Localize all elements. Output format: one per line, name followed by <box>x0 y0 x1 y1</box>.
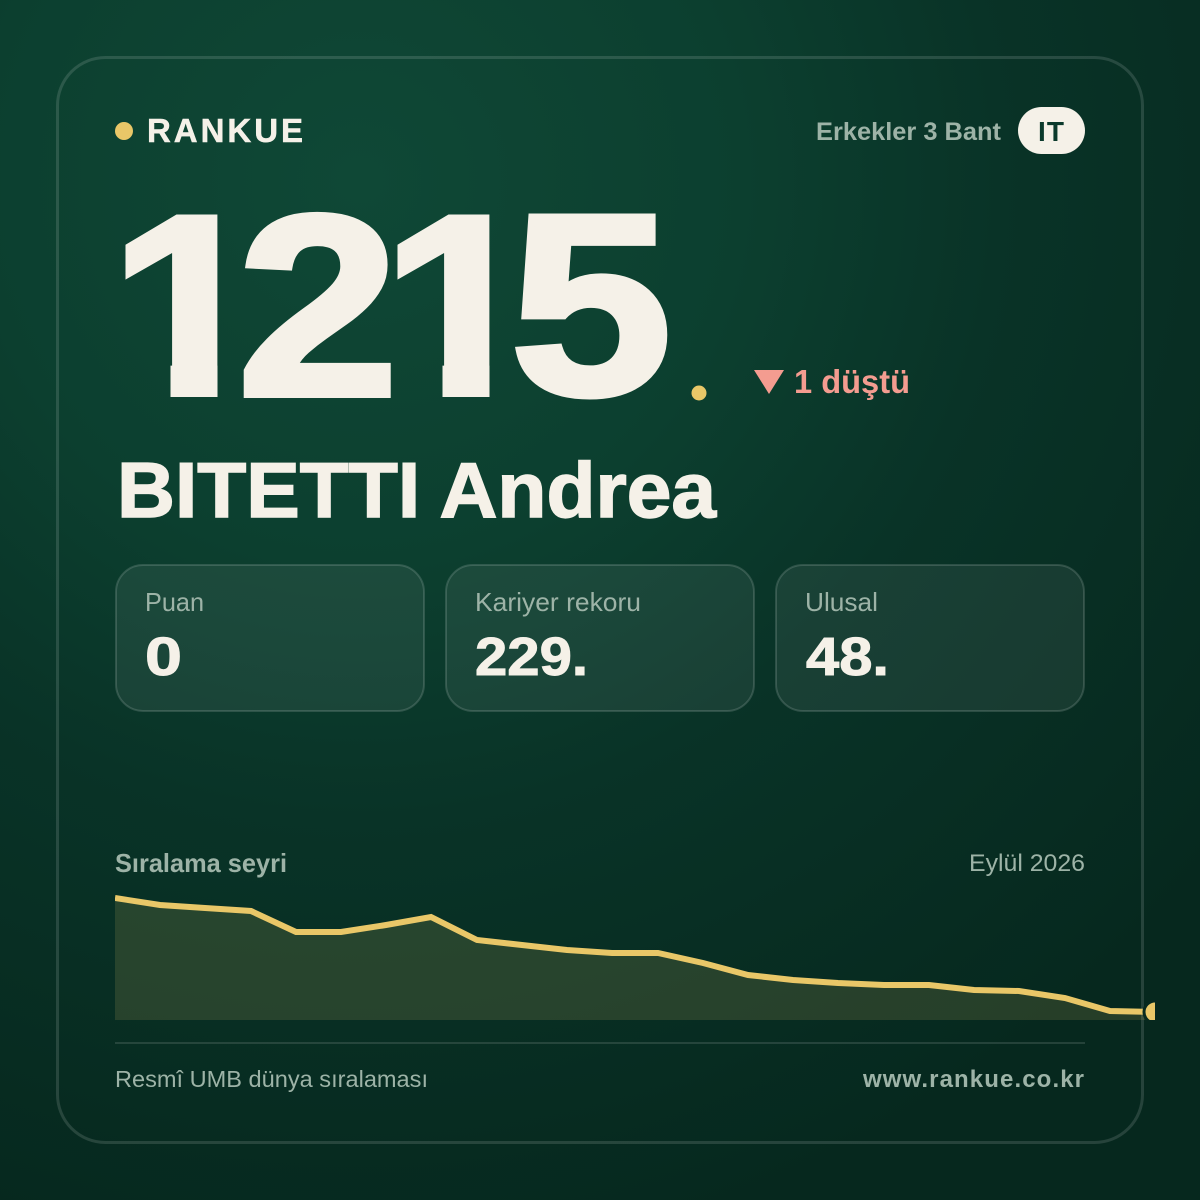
rank change: 1 düştü <box>794 363 910 400</box>
rank dot <box>692 386 706 400</box>
chart date: Eylül 2026 <box>969 850 1085 877</box>
rank number: 2 <box>237 161 399 450</box>
rank number: 5 <box>510 160 672 449</box>
panel: national: 48. <box>806 627 889 687</box>
chart heading: Sıralama seyri <box>115 848 287 878</box>
panel: career high <box>446 565 754 711</box>
footer website: www.rankue.co.kr <box>862 1066 1084 1093</box>
panel: points <box>116 565 424 711</box>
brand logo: RANKUE <box>147 112 303 149</box>
footer source: Resmî UMB dünya sıralaması <box>115 1066 428 1092</box>
panel: career high: Kariyer rekoru <box>475 587 641 617</box>
country badge <box>1018 107 1085 154</box>
category label: Erkekler 3 Bant <box>816 118 1002 146</box>
rank number: 1 <box>382 161 538 450</box>
player name: BITETTI Andrea <box>117 446 717 534</box>
panel: points: 0 <box>145 627 182 687</box>
panel: career high: 229. <box>475 627 588 687</box>
rank number: 1 <box>110 161 266 450</box>
country badge: IT <box>1038 116 1064 147</box>
rank number <box>126 212 668 400</box>
panel: points: Puan <box>145 587 204 617</box>
panel: national: Ulusal <box>805 587 878 617</box>
panel: national <box>776 565 1084 711</box>
footer divider <box>115 1042 1085 1044</box>
area line chart <box>115 898 1166 1023</box>
